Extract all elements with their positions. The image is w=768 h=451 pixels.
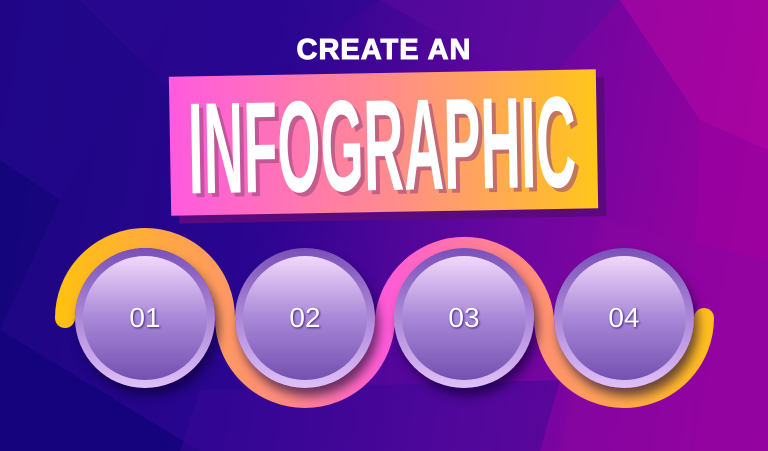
step 04: 04 (608, 302, 640, 333)
step 01 (75, 248, 215, 388)
step 04 (554, 248, 694, 388)
step 03: 03 (448, 302, 480, 333)
step 03 (394, 248, 534, 388)
step 01: 01 (129, 302, 161, 333)
step 02: 02 (289, 302, 321, 333)
title banner (168, 69, 606, 224)
step 02 (235, 248, 375, 388)
heading: create an: CREATE AN (297, 34, 471, 66)
